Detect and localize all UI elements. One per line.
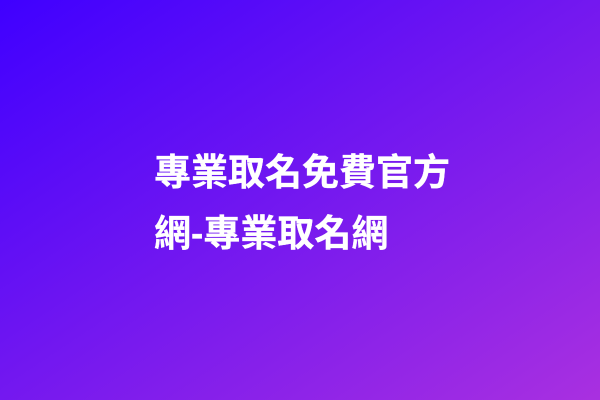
title: 專業取名免費官方 <box>154 152 450 193</box>
title: 網-專業取名網 <box>154 213 388 254</box>
